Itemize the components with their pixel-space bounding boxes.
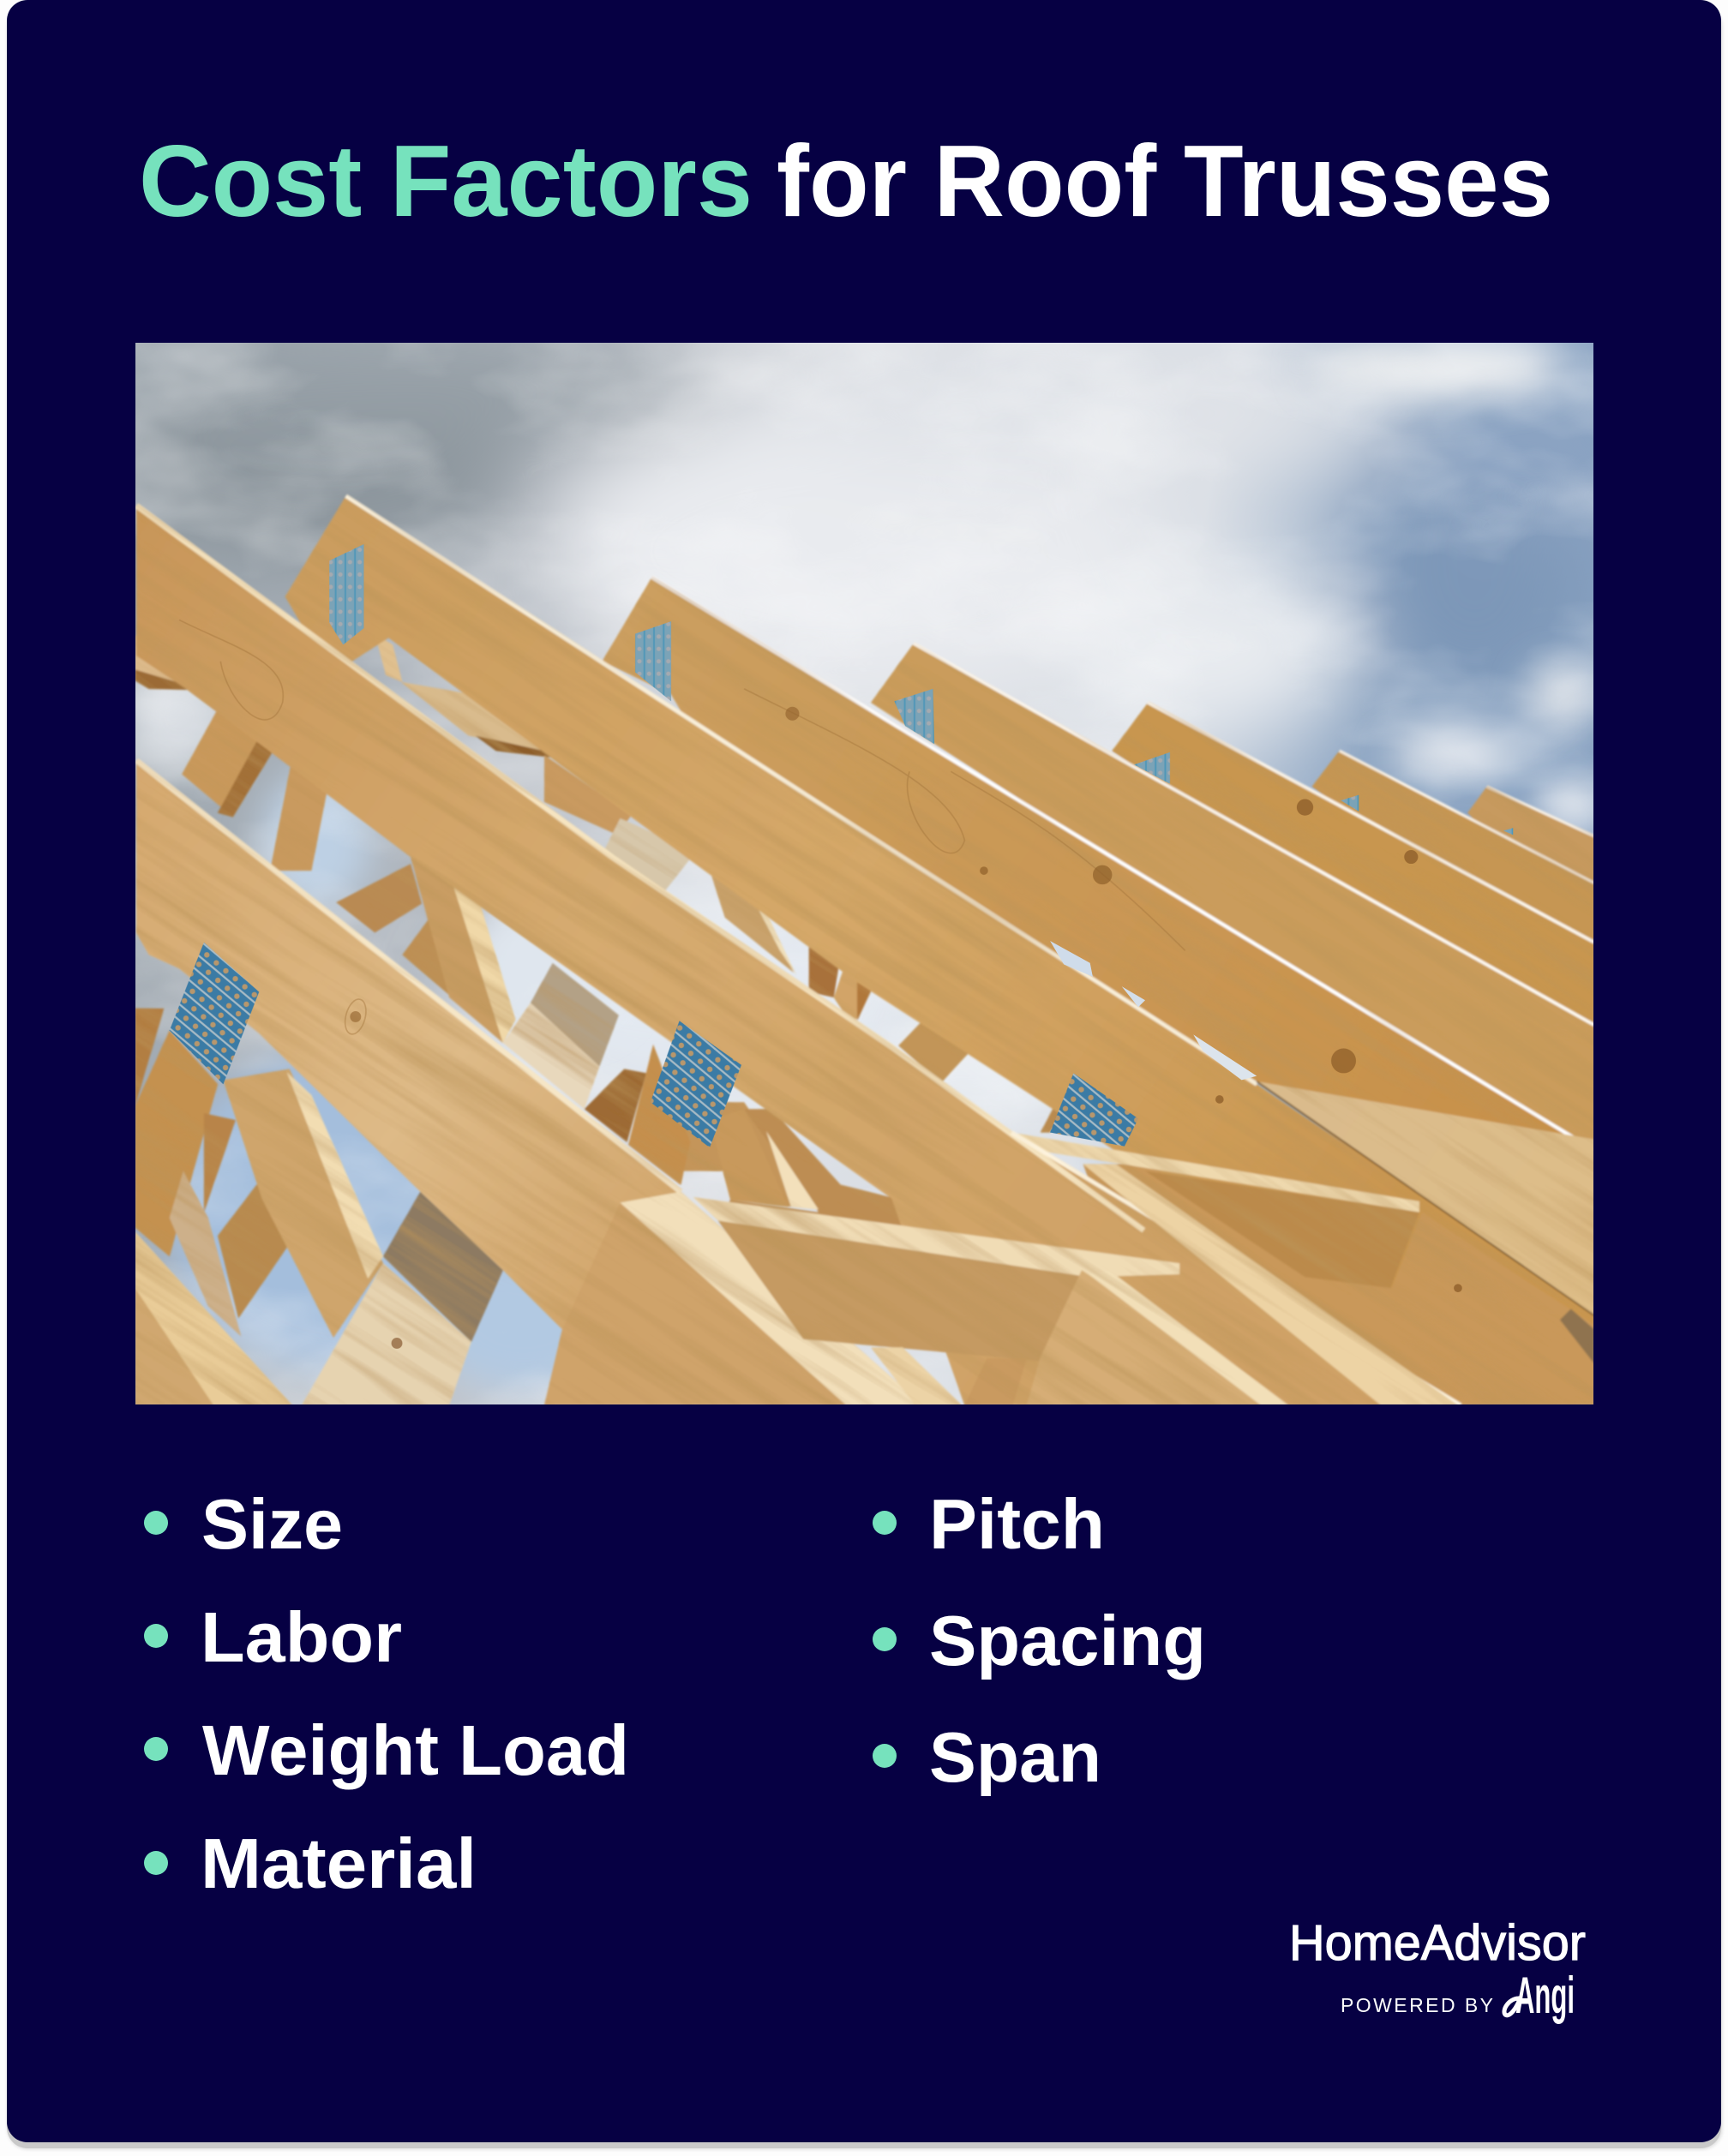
sky slivers between rafters	[1050, 941, 1257, 1080]
lower-right framing	[1011, 1133, 1594, 1405]
logo: HomeAdvisor powered by Angi	[1289, 1915, 1586, 2024]
sky	[111, 331, 1626, 1405]
rear rafters	[602, 576, 1593, 1215]
front bracing boards	[135, 1197, 1288, 1405]
title: for Roof Trusses	[777, 124, 1553, 238]
infographic canvas	[135, 142, 1593, 2024]
plywood sheathing panel	[1257, 1081, 1594, 1315]
bullet and label: Span: Span	[929, 1717, 1101, 1797]
gusset plates	[170, 544, 1513, 1147]
logo: HomeAdvisor powered by Angi: Angi	[1515, 1967, 1575, 2024]
upper truss rafter	[285, 496, 1594, 1405]
bullet and label: Size: Size	[201, 1484, 343, 1564]
back web members	[135, 634, 1064, 1405]
logo: HomeAdvisor powered by Angi: HomeAdvisor	[1289, 1915, 1586, 1971]
bullet and label: Weight Load: Weight Load	[202, 1710, 629, 1790]
knots	[350, 707, 1462, 1349]
title	[139, 124, 1553, 238]
factor list: left column	[144, 1484, 629, 1903]
bullet and label: Pitch: Pitch	[929, 1484, 1105, 1564]
timber framing with wood grain	[135, 494, 1593, 1404]
factor list: right column	[873, 1484, 1206, 1797]
front truss rafter	[136, 760, 923, 1405]
photo: timber roof trusses against a cloudy sky	[135, 343, 1593, 1404]
title: Cost Factors	[139, 124, 753, 238]
bullet and label: Labor: Labor	[201, 1597, 402, 1677]
bullet and label: Material: Material	[201, 1824, 477, 1903]
middle truss rafter	[136, 506, 1461, 1405]
bullet and label: Spacing: Spacing	[929, 1601, 1206, 1680]
logo: HomeAdvisor powered by Angi: POWERED BY	[1341, 1994, 1493, 2016]
wood grain swirls	[179, 620, 1185, 1037]
